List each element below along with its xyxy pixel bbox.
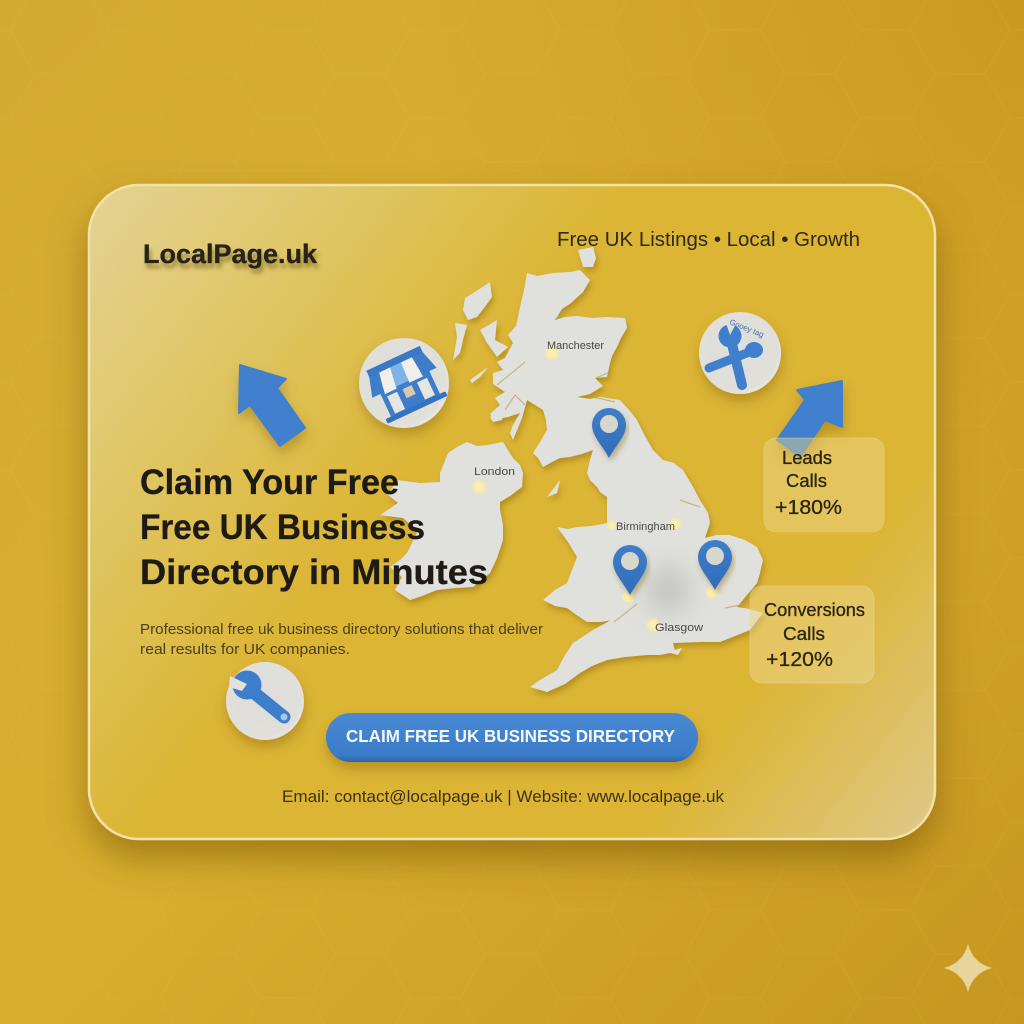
icon: storefront badge bbox=[359, 338, 449, 428]
description: real results for UK companies. bbox=[140, 642, 350, 658]
icon: map pin east bbox=[698, 540, 732, 590]
description: Professional free uk business directory solutions that deliver bbox=[140, 622, 543, 638]
icon: map pin north bbox=[592, 408, 626, 458]
map: Islay bbox=[490, 407, 503, 422]
title: Directory in Minutes bbox=[140, 553, 488, 592]
arrow: up left bbox=[239, 365, 305, 446]
map of the UK and Ireland bbox=[380, 247, 763, 692]
title: Free UK Business bbox=[140, 508, 425, 547]
stat card: conversions bbox=[750, 586, 874, 683]
icon: map pin west bbox=[613, 545, 647, 595]
stat card: leads: Calls bbox=[786, 471, 827, 491]
map: Isle of Man bbox=[547, 480, 560, 497]
stat card: conversions: Calls bbox=[783, 624, 825, 644]
icon: tools badge bbox=[699, 312, 781, 394]
city dot: Glasgow bbox=[646, 618, 660, 632]
map: Isle of Wight bbox=[667, 648, 682, 655]
map: Great Britain bbox=[490, 270, 763, 692]
city dot: pin two bbox=[622, 590, 634, 604]
tagline: Free UK Listings • Local • Growth bbox=[557, 229, 860, 251]
icon: sparkle bbox=[944, 944, 992, 992]
panel: glass card bbox=[89, 185, 935, 839]
city dot: London bbox=[472, 480, 486, 494]
map: Uist bbox=[453, 323, 467, 360]
city dot: Birmingham west bbox=[607, 520, 617, 530]
map coastline details bbox=[497, 310, 750, 622]
icon: wrench badge bbox=[226, 662, 304, 740]
city dot: Birmingham east bbox=[668, 518, 682, 530]
city dot: Manchester bbox=[544, 346, 560, 360]
description bbox=[140, 622, 543, 658]
title bbox=[140, 463, 488, 592]
contact line: Email: contact@localpage.uk | Website: www.localpage.uk bbox=[282, 788, 725, 806]
map: Ireland bbox=[380, 442, 523, 600]
stat card: conversions: Conversions bbox=[764, 600, 865, 620]
map: Skye bbox=[480, 320, 508, 357]
map: Orkney bbox=[578, 247, 596, 267]
label: London: London bbox=[474, 466, 515, 478]
label: Manchester: Manchester bbox=[547, 340, 604, 352]
label: Birmingham: Birmingham bbox=[616, 521, 675, 533]
map shading bbox=[648, 566, 688, 614]
map: Lewis and Harris bbox=[463, 282, 492, 320]
title: Claim Your Free bbox=[140, 463, 399, 502]
city dot: pin three bbox=[705, 585, 719, 599]
label: Glasgow: Glasgow bbox=[655, 622, 703, 634]
button: call to action: CLAIM FREE UK BUSINESS DIRECTORY bbox=[346, 726, 675, 746]
button: call to action bbox=[326, 713, 698, 762]
stat card: leads bbox=[764, 438, 884, 532]
logo: LocalPage.uk bbox=[143, 239, 318, 269]
stat card: leads: +180% bbox=[775, 496, 842, 519]
badge caption: Gooey tag bbox=[728, 318, 765, 339]
stat card: conversions: +120% bbox=[766, 648, 833, 671]
map: Inner Hebrides bbox=[470, 367, 488, 383]
stat card: leads: Leads bbox=[782, 448, 832, 468]
arrow: up right bbox=[777, 381, 842, 457]
